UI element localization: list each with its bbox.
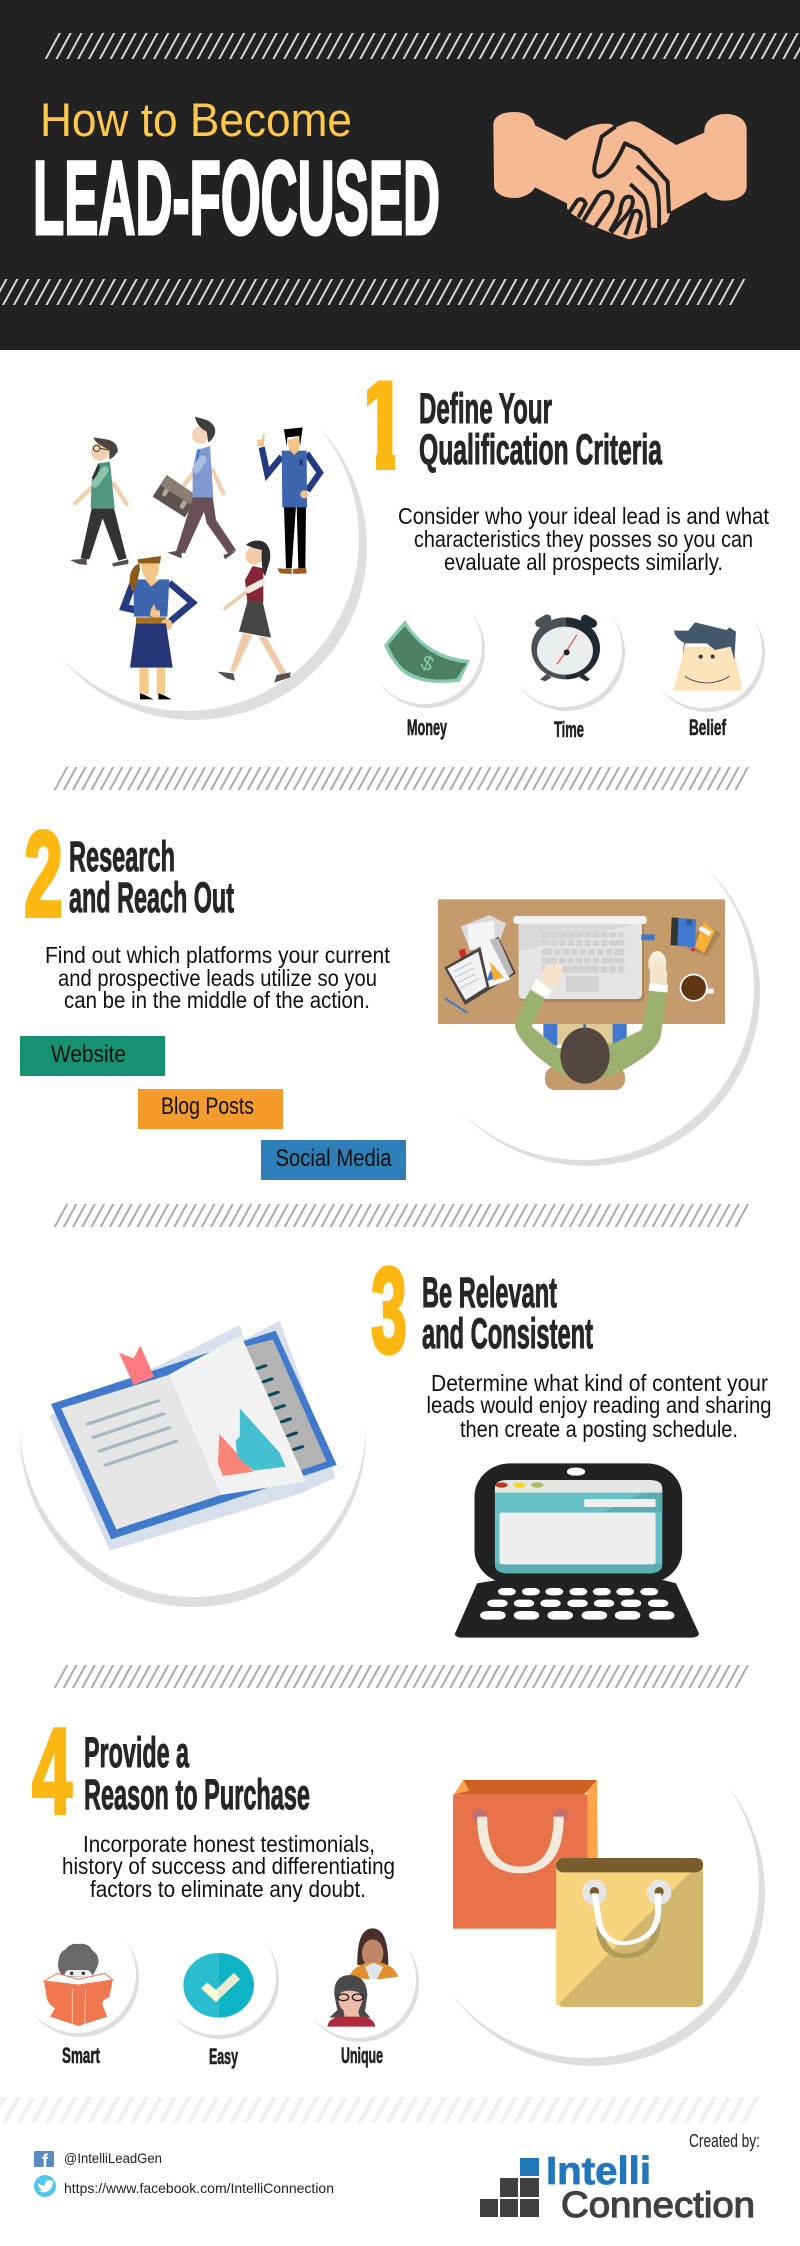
section 1 heading bbox=[419, 385, 663, 474]
icon: clock bbox=[506, 591, 625, 711]
orange bag bbox=[453, 1780, 598, 1929]
label: smart: Smart bbox=[62, 2043, 100, 2068]
section 1 illustration: people in circle bbox=[13, 365, 367, 720]
icon: facebook bbox=[34, 2151, 54, 2171]
icon: money bbox=[366, 588, 485, 708]
label: money: Money bbox=[407, 715, 447, 740]
icon: belief face bbox=[646, 592, 765, 712]
section 3 heading: Be Relevant bbox=[422, 1269, 557, 1317]
section 3 body text: then create a posting schedule. bbox=[460, 1416, 738, 1442]
created by: Created by: bbox=[689, 2131, 760, 2151]
section 2 heading: Research bbox=[69, 833, 175, 881]
section 2 heading: and Reach Out bbox=[69, 874, 234, 922]
icon: laptop bbox=[455, 1463, 699, 1638]
person: standing man bbox=[257, 427, 320, 574]
label: unique: Unique bbox=[341, 2043, 383, 2068]
section 3 heading bbox=[422, 1269, 593, 1358]
section 4 body text: history of success and differentiating bbox=[62, 1853, 395, 1879]
section 2 body text: can be in the middle of the action. bbox=[64, 987, 370, 1013]
section 1 body text: evaluate all prospects similarly. bbox=[444, 549, 723, 575]
section 4 heading: Reason to Purchase bbox=[84, 1771, 310, 1819]
tag: website bbox=[20, 1036, 165, 1076]
section 3 illustration: open book bbox=[20, 1251, 366, 1607]
section 4 heading: Provide a bbox=[84, 1729, 190, 1777]
person: walking woman bbox=[217, 541, 291, 683]
section 4 number: 4 bbox=[32, 1703, 72, 1839]
person: briefcase bbox=[153, 417, 237, 559]
section 3 body text: Determine what kind of content your bbox=[431, 1370, 768, 1396]
desk items: books bbox=[671, 917, 721, 956]
person: green shirt bbox=[70, 437, 128, 567]
section 1 heading: Define Your bbox=[419, 385, 552, 433]
laptop on desk bbox=[513, 916, 655, 1002]
label: easy: Easy bbox=[209, 2044, 238, 2069]
tag: social media: Social Media bbox=[276, 1145, 392, 1172]
icon: easy check bbox=[158, 1917, 279, 2039]
section 4 heading bbox=[84, 1729, 310, 1819]
section 1 body text bbox=[398, 503, 770, 575]
footer url: https://www.facebook.com/IntelliConnection bbox=[64, 2180, 334, 2196]
section 4 body text: Incorporate honest testimonials, bbox=[83, 1831, 375, 1857]
icon: unique people bbox=[298, 1920, 419, 2042]
tag: blog posts bbox=[138, 1089, 283, 1129]
footer handle: @IntelliLeadGen bbox=[64, 2150, 162, 2166]
tag: social media bbox=[261, 1140, 406, 1180]
tag: website: Website bbox=[51, 1041, 126, 1068]
yellow bag bbox=[556, 1858, 703, 2007]
icon: money: $ bbox=[417, 651, 438, 677]
section 2 body text: and prospective leads utilize so you bbox=[58, 965, 377, 991]
section 1 number: 1 bbox=[355, 354, 410, 496]
logo: intelli connection: Intelli bbox=[546, 2150, 651, 2193]
icon: smart reader bbox=[18, 1915, 139, 2037]
label: time: Time bbox=[554, 717, 584, 742]
person from above bbox=[515, 951, 668, 1084]
label: belief: Belief bbox=[689, 715, 726, 740]
header banner bbox=[0, 0, 800, 350]
section 4 body text bbox=[62, 1831, 395, 1902]
section 3 body text bbox=[426, 1370, 772, 1442]
logo: intelli connection bbox=[480, 2150, 755, 2225]
section 2 body text bbox=[45, 942, 391, 1013]
person: woman in blue dress bbox=[124, 556, 193, 699]
tag: blog posts: Blog Posts bbox=[161, 1093, 254, 1120]
section 2 heading bbox=[69, 833, 234, 922]
icon: facebook: f bbox=[42, 2151, 49, 2171]
section 4 body text: factors to eliminate any doubt. bbox=[90, 1876, 366, 1902]
section 3 number: 3 bbox=[371, 1242, 407, 1378]
chair and legs bbox=[543, 1024, 627, 1090]
section 4 illustration: shopping bags bbox=[413, 1712, 765, 2066]
section 3 heading: and Consistent bbox=[422, 1310, 593, 1358]
icon: twitter bbox=[34, 2175, 56, 2197]
desk items: notebook bbox=[444, 915, 516, 1013]
title: how to become: How to Become bbox=[40, 93, 352, 146]
section 1 body text: characteristics they posses so you can bbox=[414, 526, 753, 552]
section 2 number: 2 bbox=[24, 806, 63, 942]
section 2 illustration: person at desk bbox=[408, 814, 760, 1166]
desk items: coffee cup bbox=[680, 974, 714, 1002]
icon: handshake bbox=[493, 112, 747, 239]
logo: intelli connection: Connection bbox=[561, 2184, 755, 2225]
section 2 body text: Find out which platforms your current bbox=[45, 942, 391, 968]
